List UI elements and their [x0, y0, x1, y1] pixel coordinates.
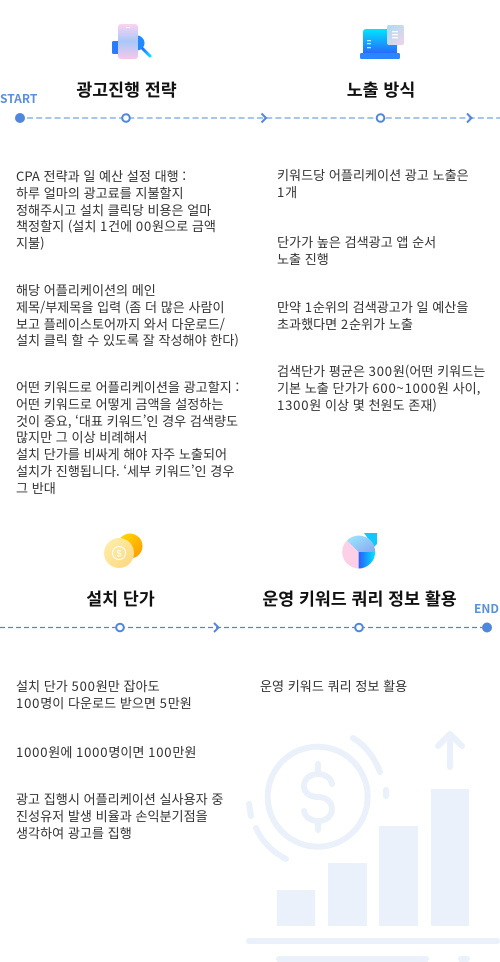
text: keyword advice: 어떤 키워드로 어플리케이션을 광고할지 : 어떤 키워드로 어떻게 금액을 설정하는 것이 중요, ‘대표 키워드’인 경우 검색량도 많지만 그 이상 비례해서 설치 단가를 비싸게 해야 자주 노출되어 설치가 진행됩니다. ‘세부 키워드’인 경우 그 반대 [16, 377, 239, 497]
icon: pie chart [342, 533, 377, 568]
text: one per keyword: 키워드당 어플리케이션 광고 노출은 1개 [277, 165, 469, 201]
heading: ad strategy: 광고진행 전략 [76, 76, 177, 101]
text: title input: 해당 어플리케이션의 메인 제목/부제목을 입력 (좀 더 많은 사람이 보고 플레이스토어까지 와서 다운로드/ 설치 클릭 할 수 있도록 잘 작성해야 한다) [16, 280, 239, 349]
icon: laptop [360, 25, 404, 59]
text: 1000 won example: 1000원에 1000명이면 100만원 [16, 742, 196, 761]
text: break-even: 광고 집행시 어플리케이션 실사용자 중 진성유저 발생 비율과 손익분기점을 생각하여 광고를 집행 [16, 789, 223, 842]
text: strategy details: CPA 전략과 일 예산 설정 대행 : 하루 얼마의 광고료를 지불할지 정해주시고 설치 클릭당 비용은 얼마 책정할지 (설치 1건에 00원으로 금액 지불) [16, 166, 216, 252]
label: end: END [474, 600, 499, 617]
text: budget overflow: 만약 1순위의 검색광고가 일 예산을 초과했다면 2순위가 노출 [277, 297, 468, 333]
heading: exposure method: 노출 방식 [347, 76, 415, 101]
text: order by price: 단가가 높은 검색광고 앱 순서 노출 진행 [277, 232, 436, 268]
icon: coins: $ [116, 548, 122, 558]
bottom timeline [0, 622, 492, 633]
text: average price: 검색단가 평균은 300원(어떤 키워드는 기본 노출 단가가 600~1000원 사이, 1300원 이상 몇 천원도 존재) [277, 361, 485, 414]
label: start: START [0, 90, 37, 107]
heading: install price: 설치 단가 [86, 585, 155, 610]
text: install price example: 설치 단가 500원만 잡아도 100명이 다운로드 받으면 5만원 [16, 676, 192, 712]
heading: keyword query usage: 운영 키워드 쿼리 정보 활용 [262, 585, 457, 610]
icon: phone with magnifier [112, 24, 152, 59]
background chart illustration [246, 731, 500, 962]
text: keyword query: 운영 키워드 쿼리 정보 활용 [260, 676, 407, 695]
icon: coins [104, 534, 142, 568]
top timeline [15, 112, 500, 124]
